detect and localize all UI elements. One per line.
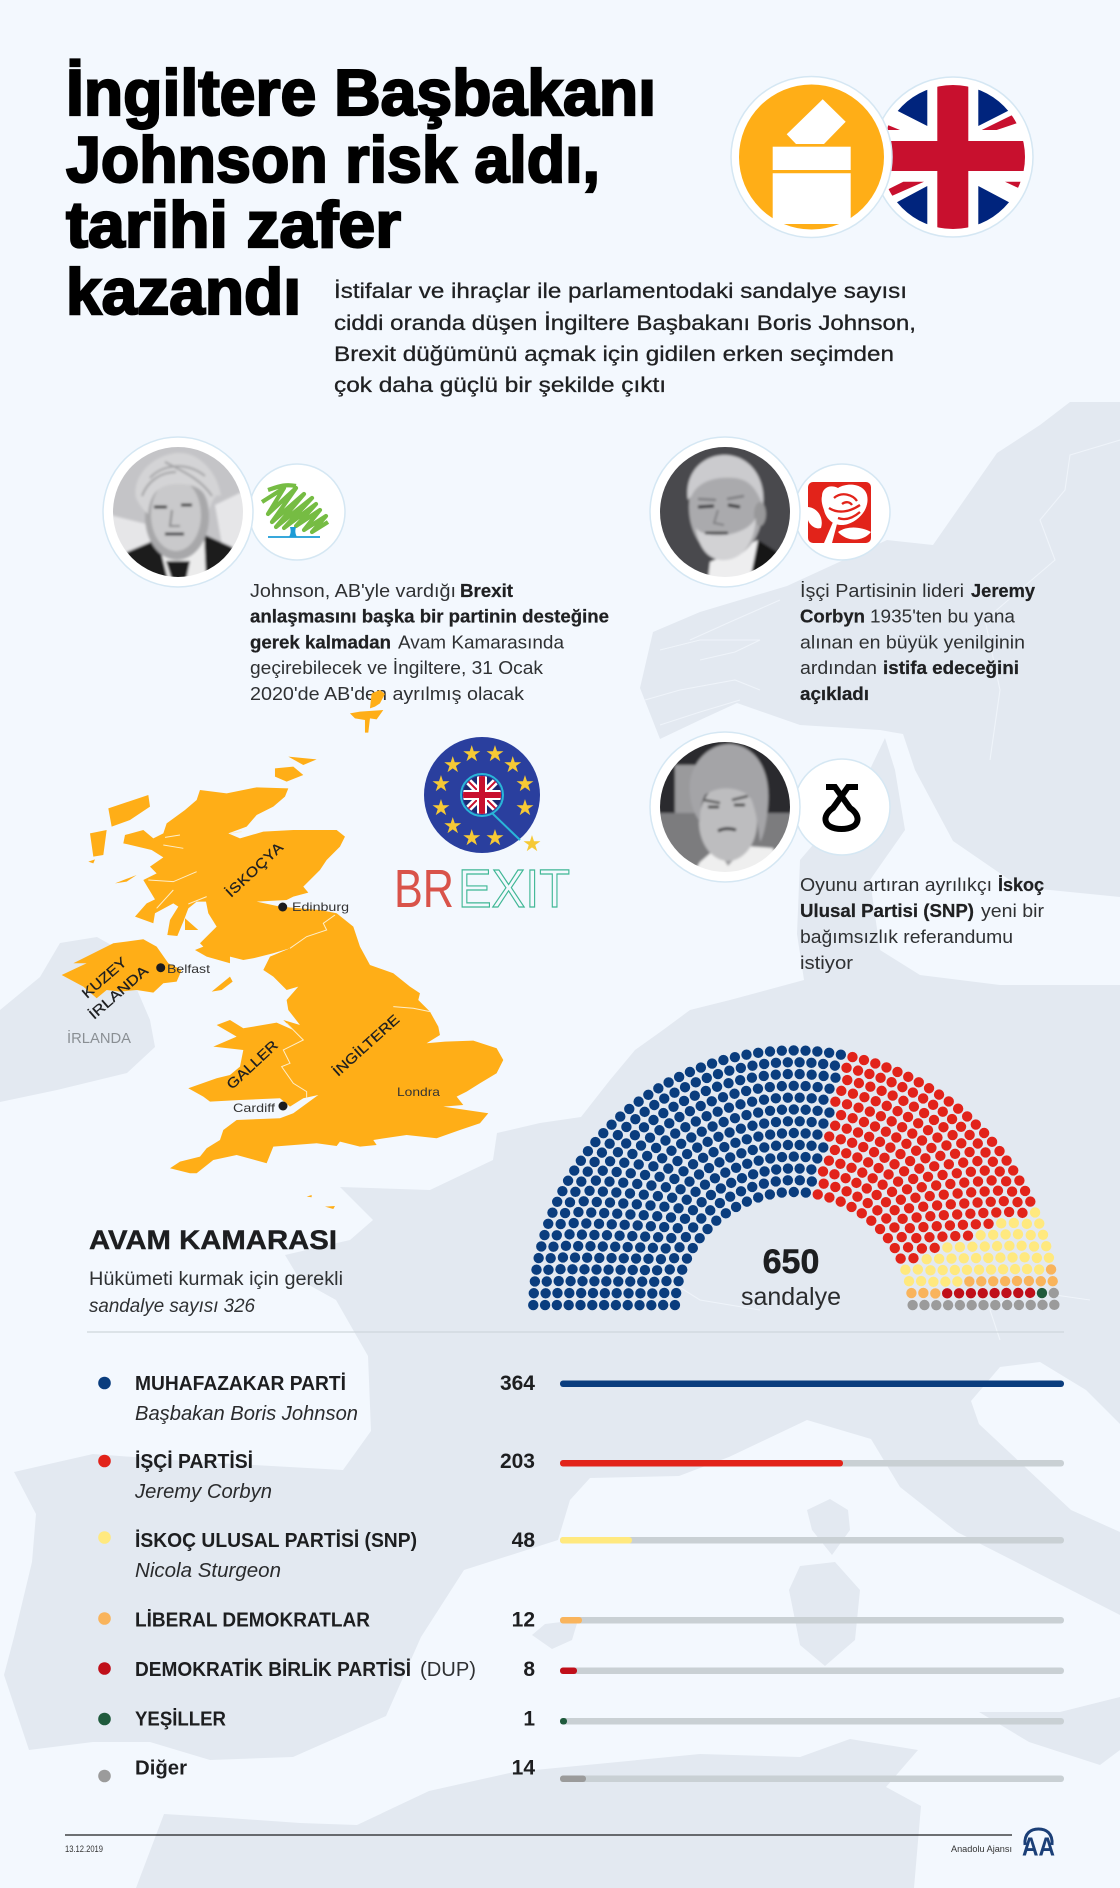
subtitle bbox=[334, 280, 916, 397]
map labels: GALLER bbox=[223, 1037, 281, 1092]
text: Corbyn: İşçi Partisinin lideri bbox=[800, 580, 964, 601]
logo: conservative tree bbox=[262, 485, 328, 537]
text: Johnson: 2020'de AB'den ayrılmış olacak bbox=[250, 683, 525, 704]
text: SNP: Oyunu artıran ayrılıkçı bbox=[800, 874, 992, 895]
map labels: KUZEY bbox=[78, 953, 130, 1001]
legend row: Liberal bbox=[98, 1608, 1064, 1632]
logo: Brexit: ★ bbox=[485, 741, 505, 766]
footer: 13.12.2019 bbox=[65, 1844, 103, 1854]
legend row: SNP: Nicola Sturgeon bbox=[135, 1560, 281, 1582]
legend row: DUP: DEMOKRATİK BİRLİK PARTİSİ bbox=[135, 1658, 411, 1681]
map labels: Cardiff bbox=[233, 1101, 276, 1115]
title: kazandı bbox=[66, 255, 301, 328]
subtitle: çok daha güçlü bir şekilde çıktı bbox=[334, 374, 666, 397]
legend row: DUP: 8 bbox=[523, 1658, 535, 1681]
footer: Anadolu Ajansı bbox=[951, 1844, 1012, 1854]
logo: Brexit: ★ bbox=[515, 771, 535, 796]
map labels: Edinburg bbox=[292, 900, 349, 914]
text: Johnson: anlaşmasını başka bir partinin desteğine bbox=[250, 606, 609, 626]
legend row: Yeşiller: 1 bbox=[523, 1708, 535, 1730]
legend row: Yeşiller bbox=[98, 1708, 1064, 1730]
icon: union flag circle bbox=[873, 77, 1033, 240]
logo: Brexit: ★ bbox=[515, 795, 535, 820]
text: Corbyn: Corbyn bbox=[800, 606, 865, 626]
seat total: sandalye bbox=[741, 1283, 841, 1311]
text: Johnson: geçirebilecek ve İngiltere, 31 Ocak bbox=[250, 657, 544, 678]
subtitle: İstifalar ve ihraçlar ile parlamentodaki sandalye sayısı bbox=[334, 280, 907, 303]
title: Johnson risk aldı, bbox=[66, 123, 600, 196]
logo: Brexit: ★ bbox=[522, 831, 542, 856]
legend row: SNP: 48 bbox=[512, 1529, 535, 1552]
map: United Kingdom bbox=[62, 690, 503, 1209]
legend row: İşçi: 203 bbox=[500, 1450, 535, 1473]
legend row: İşçi: İŞÇİ PARTİSİ bbox=[135, 1450, 253, 1473]
heading: Avam Kamarası: AVAM KAMARASI bbox=[89, 1225, 337, 1255]
legend row: Muhafazakar: Başbakan Boris Johnson bbox=[135, 1403, 358, 1425]
logo: Anadolu Ajansı: AA bbox=[1022, 1832, 1055, 1862]
title bbox=[66, 56, 656, 328]
text: SNP bbox=[800, 874, 1044, 973]
logo: Brexit bbox=[394, 737, 570, 919]
map labels: Londra bbox=[397, 1085, 440, 1099]
logo: SNP bbox=[825, 787, 858, 829]
portrait: Jeremy Corbyn bbox=[650, 437, 890, 587]
legend row: Diğer bbox=[98, 1756, 1064, 1782]
text: Corbyn: istifa edeceğini bbox=[883, 657, 1019, 678]
map labels: Belfast bbox=[167, 962, 211, 976]
logo: Brexit: ★ bbox=[462, 825, 482, 850]
legend row: Yeşiller: YEŞİLLER bbox=[135, 1708, 227, 1730]
portrait: Nicola Sturgeon bbox=[650, 732, 890, 882]
icon: ballot box bbox=[731, 76, 892, 238]
text: SNP: Ulusal Partisi (SNP) bbox=[800, 900, 974, 921]
text: Corbyn: Jeremy bbox=[971, 580, 1036, 601]
legend row: İşçi: Jeremy Corbyn bbox=[134, 1481, 272, 1503]
text: Johnson: Johnson, AB'yle vardığı bbox=[250, 580, 456, 601]
text: Johnson: Avam Kamarasında bbox=[398, 632, 565, 652]
seat total bbox=[741, 1243, 841, 1311]
text: Johnson: Brexit bbox=[460, 580, 513, 601]
heading: Avam Kamarası: Hükümeti kurmak için gerekli bbox=[89, 1269, 343, 1290]
portrait: Boris Johnson bbox=[103, 437, 345, 587]
map labels: İNGİLTERE bbox=[329, 1010, 402, 1079]
map labels: İRLANDA bbox=[85, 961, 152, 1022]
map labels: İRLANDA bbox=[67, 1029, 131, 1047]
map labels bbox=[67, 838, 440, 1115]
logo: Brexit: ★ bbox=[431, 795, 451, 820]
logo: Brexit: EXIT bbox=[458, 859, 570, 919]
legend row: İşçi bbox=[98, 1450, 1064, 1503]
logo: Brexit: ★ bbox=[443, 752, 463, 777]
logo: Brexit: ★ bbox=[462, 741, 482, 766]
text: Corbyn bbox=[800, 580, 1036, 704]
seat total: 650 bbox=[763, 1243, 819, 1281]
legend row: DUP: (DUP) bbox=[420, 1659, 476, 1681]
legend row: SNP bbox=[98, 1529, 1064, 1582]
logo: labour rose bbox=[808, 482, 871, 543]
subtitle: ciddi oranda düşen İngiltere Başbakanı Boris Johnson, bbox=[334, 312, 916, 335]
text: Johnson bbox=[250, 580, 609, 704]
legend row: SNP: İSKOÇ ULUSAL PARTİSİ (SNP) bbox=[135, 1529, 417, 1552]
chart: parliament seats hemicycle bbox=[528, 1045, 1060, 1310]
legend row: Liberal: LİBERAL DEMOKRATLAR bbox=[135, 1608, 371, 1632]
heading: Avam Kamarası: sandalye sayısı 326 bbox=[89, 1296, 255, 1317]
map labels: İSKOÇYA bbox=[221, 838, 287, 900]
legend row: DUP bbox=[98, 1658, 1064, 1681]
heading: Avam Kamarası bbox=[89, 1225, 343, 1317]
logo: Brexit: ★ bbox=[431, 771, 451, 796]
text: Corbyn: açıkladı bbox=[800, 683, 869, 704]
footer bbox=[65, 1835, 1012, 1854]
title: İngiltere Başbakanı bbox=[66, 56, 656, 129]
legend row: Liberal: 12 bbox=[512, 1608, 535, 1632]
subtitle: Brexit düğümünü açmak için gidilen erken seçimden bbox=[334, 343, 894, 366]
text: SNP: istiyor bbox=[800, 952, 853, 973]
title: tarihi zafer bbox=[66, 188, 401, 261]
legend row: Muhafazakar: MUHAFAZAKAR PARTİ bbox=[135, 1372, 346, 1395]
logo: Brexit: BR bbox=[394, 859, 454, 919]
legend row: Diğer: 14 bbox=[512, 1756, 535, 1780]
text: Corbyn: 1935'ten bu yana bbox=[870, 606, 1016, 626]
text: SNP: yeni bir bbox=[981, 900, 1044, 921]
text: Johnson: gerek kalmadan bbox=[250, 632, 391, 652]
legend row: Muhafazakar: 364 bbox=[500, 1372, 535, 1395]
legend row: Diğer: Diğer bbox=[135, 1758, 187, 1780]
logo: Brexit: ★ bbox=[503, 752, 523, 777]
logo: Brexit: ★ bbox=[443, 813, 463, 838]
logo: Brexit: ★ bbox=[485, 825, 505, 850]
text: SNP: İskoç bbox=[998, 874, 1044, 895]
text: Corbyn: alınan en büyük yenilginin bbox=[800, 632, 1025, 652]
text: SNP: bağımsızlık referandumu bbox=[800, 926, 1013, 947]
legend row: Muhafazakar bbox=[98, 1372, 1064, 1425]
text: Corbyn: ardından bbox=[800, 657, 877, 678]
